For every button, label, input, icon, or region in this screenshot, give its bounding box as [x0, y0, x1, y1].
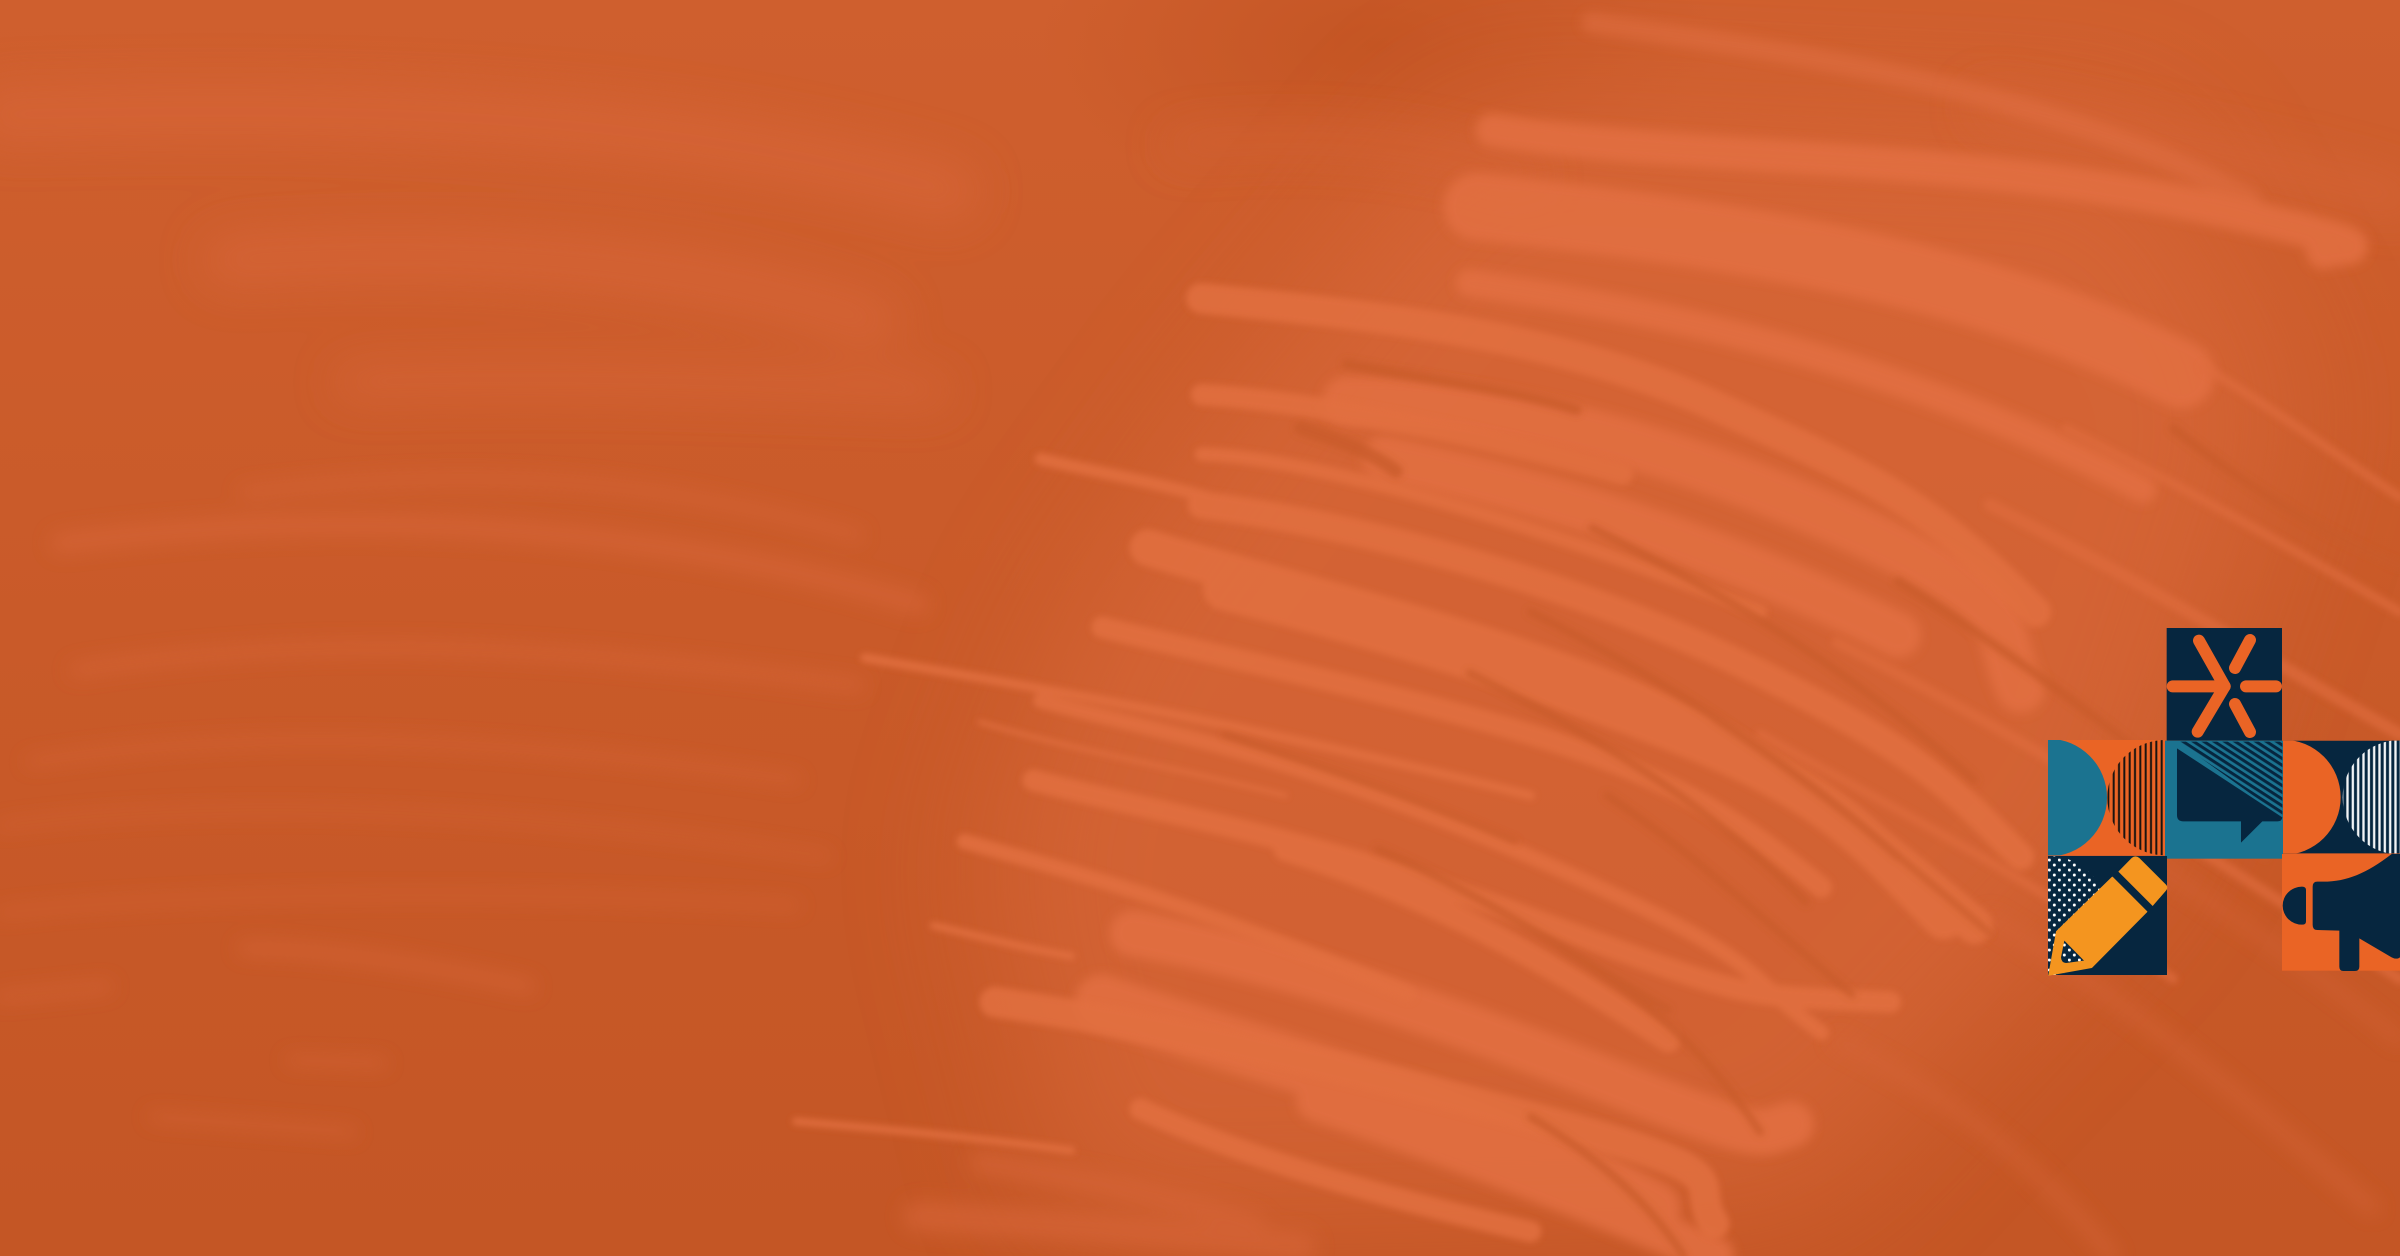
- icon cluster: six geometric tiles: [2048, 628, 2400, 976]
- tile: asterisk logo: [2167, 628, 2282, 741]
- tile: megaphone: [2282, 854, 2400, 971]
- tile: half circles with black stripes: [2048, 740, 2165, 856]
- tile: speech bubble: [2165, 741, 2283, 859]
- tile: half circles with white stripes: [2283, 740, 2400, 854]
- tile: pencil: [2048, 856, 2168, 976]
